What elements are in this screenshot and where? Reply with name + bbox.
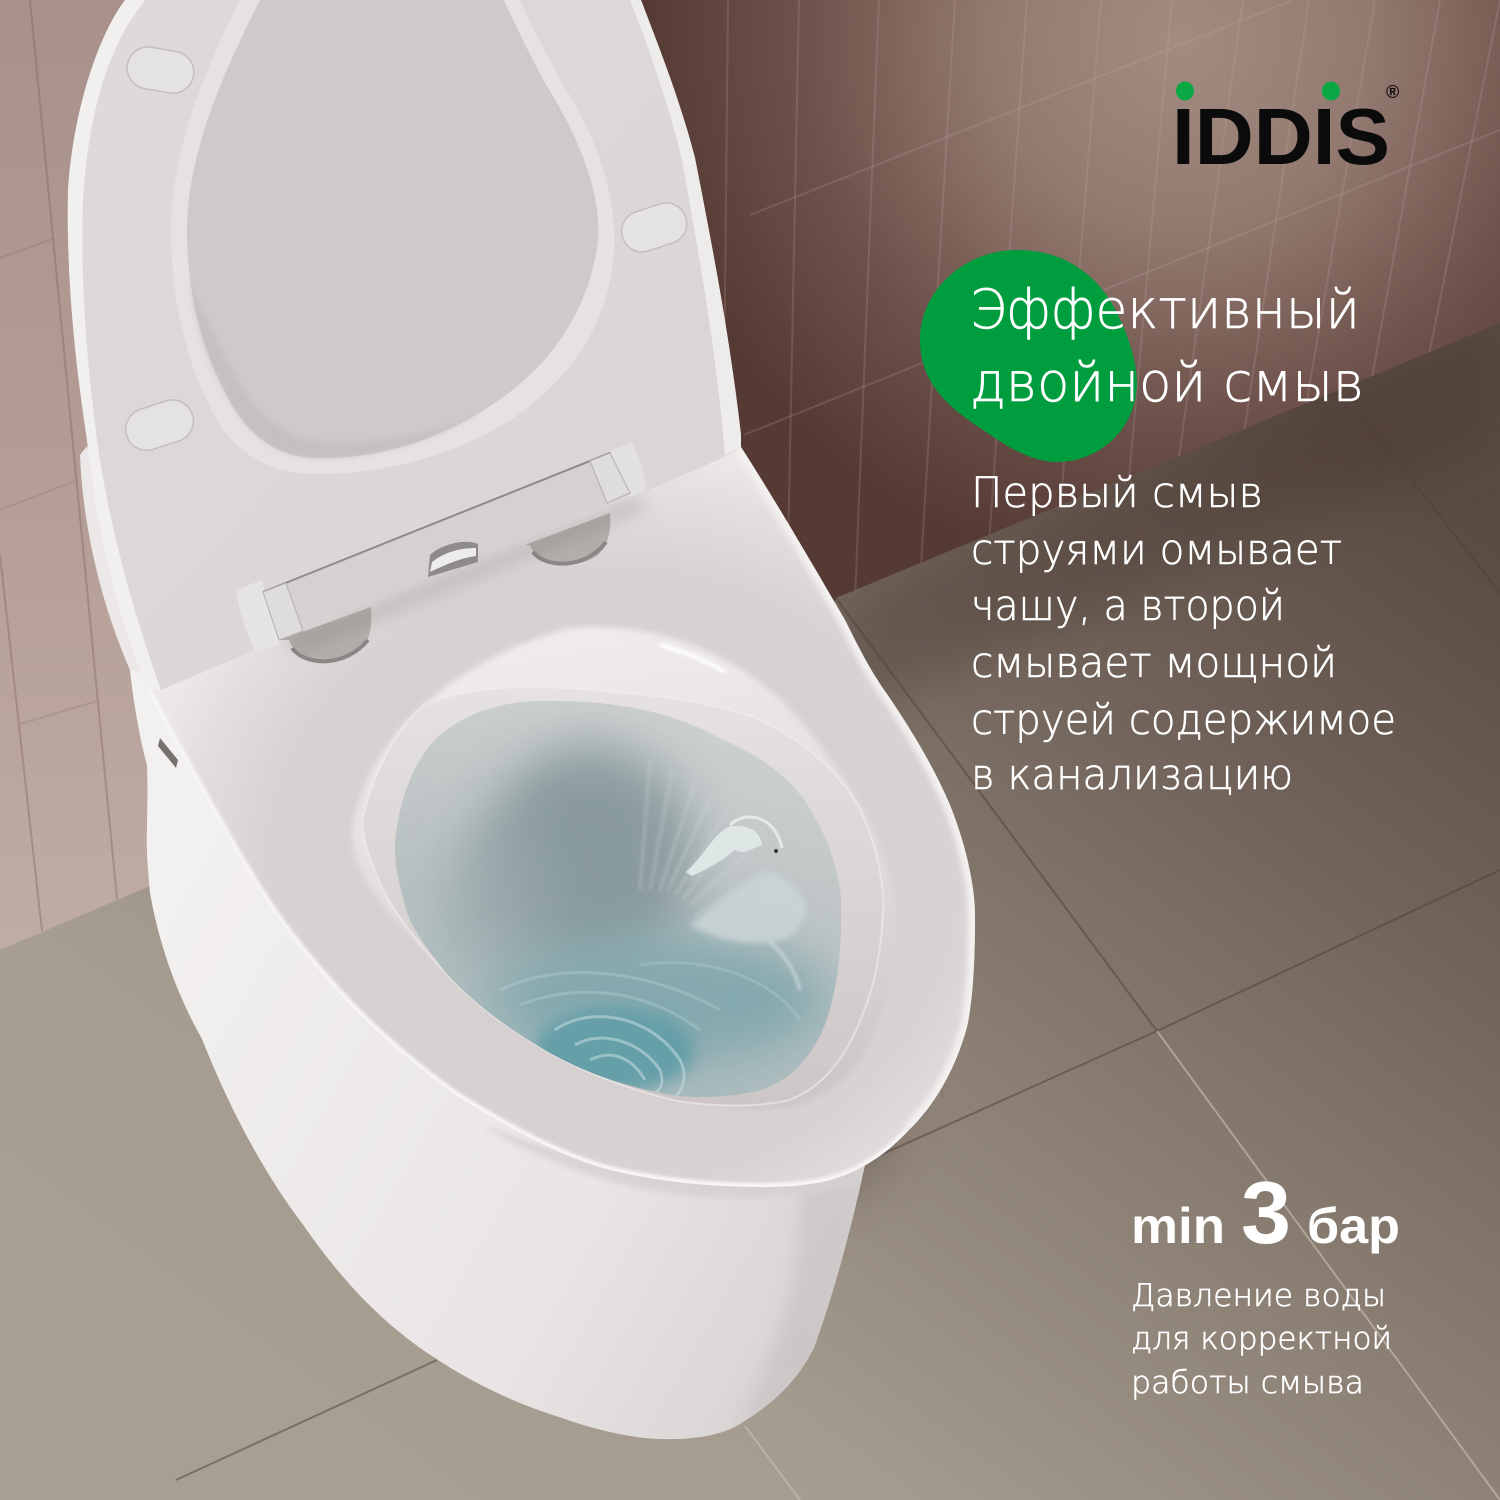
water swirl bbox=[394, 701, 841, 1098]
lid ring bbox=[171, 0, 614, 474]
logo: IDDIS: ® bbox=[1386, 82, 1399, 102]
description text: Первый смыв bbox=[971, 468, 1263, 517]
lid outer edge bbox=[68, 0, 161, 690]
title: Эффективный bbox=[970, 278, 1360, 341]
description text: смывает мощной bbox=[971, 638, 1337, 687]
description text: струями омывает bbox=[971, 525, 1342, 574]
background: wall bbox=[0, 0, 1500, 1000]
hinge bar bbox=[263, 453, 630, 640]
pressure description: Давление воды bbox=[1131, 1278, 1386, 1314]
chrome latch bbox=[428, 542, 478, 577]
toilet bowl rim bbox=[147, 447, 975, 1187]
toilet seat lid bbox=[68, 0, 741, 690]
pressure value: min bbox=[1131, 1198, 1225, 1254]
pressure description: работы смыва bbox=[1131, 1365, 1364, 1401]
chrome hinge posts bbox=[280, 495, 645, 661]
pressure value bbox=[1131, 1163, 1400, 1262]
lid inner egg bbox=[187, 0, 598, 458]
toilet body bbox=[130, 670, 865, 1439]
toilet tank behind lid bbox=[80, 446, 150, 690]
lid bumpers bbox=[124, 44, 197, 97]
pressure description bbox=[1131, 1278, 1392, 1401]
pressure value: 3 bbox=[1241, 1163, 1291, 1262]
description text: в канализацию bbox=[971, 750, 1293, 799]
description text: струей содержимое bbox=[971, 695, 1396, 744]
pressure value: бар bbox=[1307, 1198, 1400, 1254]
hinge brackets bbox=[236, 580, 280, 651]
title bbox=[970, 278, 1364, 414]
green blob bbox=[920, 250, 1137, 462]
description text: чашу, а второй bbox=[971, 581, 1285, 630]
logo: IDDIS: IDDIS bbox=[1172, 92, 1390, 181]
background: floor bbox=[0, 323, 1500, 1500]
inner bowl funnel bbox=[352, 627, 896, 1110]
white foam bbox=[690, 872, 806, 943]
title: двойной смыв bbox=[970, 351, 1364, 414]
description text bbox=[971, 468, 1396, 799]
pressure description: для корректной bbox=[1131, 1321, 1392, 1357]
